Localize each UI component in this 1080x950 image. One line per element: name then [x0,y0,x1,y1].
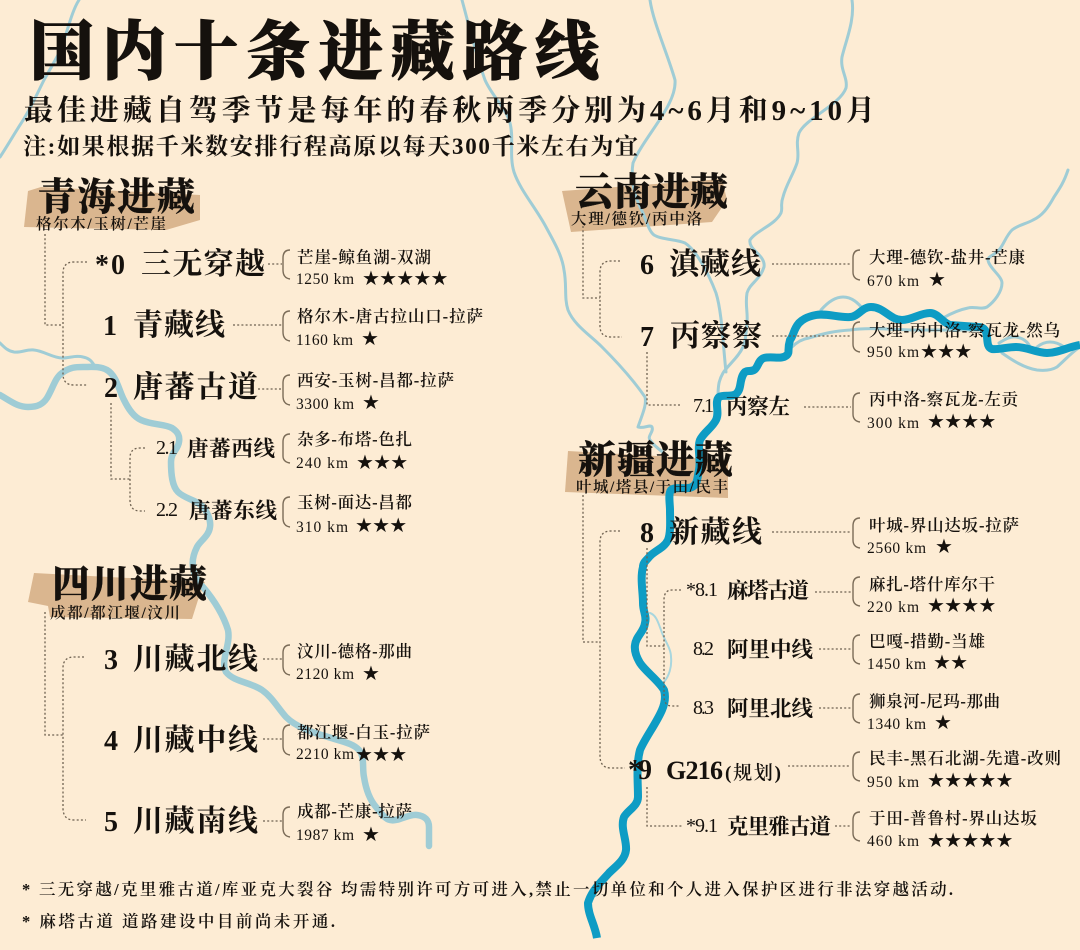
route 0: 1250 km [296,271,354,288]
route 9: *9 [628,755,652,786]
route 8.2 [693,632,986,674]
route 9.1: 克里雅古道 [727,815,831,839]
route 8.3: 1340 km [867,716,926,733]
route 2 [104,370,454,414]
route 4: 川藏中线 [133,724,258,757]
route 0 [95,248,448,290]
connectors [45,234,145,511]
route 2.1: ★★★ [356,450,407,474]
route 7.1: 7.1 [693,395,714,417]
route 2: ★ [362,390,379,414]
panel: Xinjiang [576,440,1061,852]
route 3: 3 [104,645,118,676]
route 7.1 [693,389,1020,433]
route 3: 汶川-德格-那曲 [297,641,412,661]
subheading: 叶城/塔县/于田/民丰 [576,477,728,496]
route 6: 6 [640,250,654,281]
route 0: 三无穿越 [141,248,265,281]
route 2: 3300 km [296,396,354,413]
route 2.2: 玉树-面达-昌都 [297,492,412,512]
route 7.1: 丙中洛-察瓦龙-左贡 [869,389,1020,409]
heading: 云南进藏 [575,172,728,214]
route 1 [103,306,483,350]
map: main blue river [588,307,1080,938]
subheading: 大理/德钦/丙中洛 [571,209,702,228]
route 2.2: 310 km [296,519,348,536]
route 9.1: *9.1 [686,815,718,837]
route 8.2: 阿里中线 [727,638,813,662]
route 8.1 [686,575,996,617]
route 7: ★★★ [920,339,971,363]
route 6: ★ [928,267,945,291]
connectors [45,612,86,820]
route 8.2: ★★ [933,650,967,674]
route 0: 芒崖-鲸鱼湖-双湖 [297,248,431,267]
route 9: 民丰-黑石北湖-先遣-改则 [869,748,1061,768]
route 2.1 [156,430,412,474]
route 6 [640,247,1026,291]
route 9.1 [686,809,1038,852]
route 3 [104,641,412,685]
route 7: 丙察察 [670,319,762,353]
route 7.1: ★★★★ [927,409,996,433]
route 6: 滇藏线 [669,248,761,281]
route 8.2: 巴嘎-措勤-当雄 [869,632,986,651]
subtitle: 最佳进藏自驾季节是每年的春秋两季分别为4~6月和9~10月 [24,93,875,127]
route 1: 格尔木-唐古拉山口-拉萨 [297,306,483,326]
route 2.2: ★★★ [355,513,406,537]
subheading: 格尔木/玉树/芒崖 [36,214,166,233]
route 5: 川藏南线 [133,805,258,838]
route 9: 950 km [867,774,919,791]
route 2.1: 唐蕃西线 [187,437,275,461]
route 7: 大理-丙中洛-察瓦龙-然乌 [869,320,1060,340]
route 9: ★★★★★ [927,768,1013,792]
route 7.1: 丙察左 [726,394,790,419]
route 4: 2210 km [296,746,354,763]
footnote 1: * 三无穿越/克里雅古道/库亚克大裂谷 均需特别许可方可进入,禁止一切单位和个人进入保护区进行非法穿越活动. [22,879,953,899]
route 7 [640,319,1060,363]
route 5: 1987 km [296,827,354,844]
route 2.2: 2.2 [156,499,178,521]
panel: Qinghai [36,177,483,537]
connectors [583,226,682,405]
route 8.1: 220 km [867,599,919,616]
route 8: ★ [935,534,952,558]
panel: Sichuan [45,564,430,846]
footnote 2: * 麻塔古道 道路建设中目前尚未开通. [22,911,335,931]
route 4: 4 [104,726,118,757]
route 8: 叶城-界山达坂-拉萨 [869,515,1019,535]
route 8.3: 8.3 [693,697,714,719]
route 2.2: 唐蕃东线 [189,499,277,523]
heading: 青海进藏 [38,177,195,219]
route 3: 2120 km [296,666,354,683]
route 2: 西安-玉树-昌都-拉萨 [297,370,454,390]
route 2: 2 [104,373,118,404]
route 9: (规划) [725,762,781,784]
route 5: 5 [104,807,118,838]
route 8.1: 麻塔古道 [727,579,809,603]
heading: 新疆进藏 [578,440,733,482]
route 4: 都江堰-白玉-拉萨 [297,722,430,742]
route 0: *0 [95,250,125,281]
route 8.2: 8.2 [693,638,714,660]
route 9 [628,748,1061,792]
route 1: 青藏线 [133,309,225,342]
route 2.1: 2.1 [156,437,178,459]
route 2.1: 杂多-布塔-色扎 [297,430,412,449]
route 1: 1160 km [296,332,353,349]
route 0: ★★★★★ [362,266,448,290]
route 8.3: 狮泉河-尼玛-那曲 [869,692,1000,711]
route 8: 新藏线 [669,516,762,549]
route 9.1: 460 km [867,833,919,850]
route 6: 670 km [867,273,919,290]
section patches [24,179,728,619]
route 8: 2560 km [867,540,926,557]
route 8.2: 1450 km [867,656,926,673]
route 7.1: 300 km [867,415,919,432]
connectors [583,495,682,826]
heading: 四川进藏 [52,564,207,606]
route 5 [104,801,412,846]
route 8.3: 阿里北线 [727,697,813,721]
route 7: 7 [640,322,654,353]
route 8.1: ★★★★ [927,593,996,617]
route 8.3: ★ [934,710,951,734]
route 8.1: *8.1 [686,579,718,601]
route 6: 大理-德钦-盐井-芒康 [869,247,1026,267]
route 9: G216 [666,756,723,785]
panel: Yunnan [571,172,1060,433]
route 2: 唐蕃古道 [133,370,258,404]
route 9.1: 于田-普鲁村-界山达坂 [869,809,1038,828]
route 8.3 [693,692,1000,734]
note: 注:如果根据千米数安排行程高原以每天300千米左右为宜 [23,134,638,159]
route 2.2 [156,492,412,537]
route 8.1: 麻扎-塔什库尔干 [869,575,995,594]
route 8: 8 [640,518,654,549]
route 3: 川藏北线 [133,643,258,676]
route 1: ★ [361,326,378,350]
subheading: 成都/都江堰/汶川 [50,604,180,622]
title: 国内十条进藏路线 [30,17,599,88]
route 1: 1 [103,311,117,342]
route 7: 950 km [867,344,919,361]
route 9.1: ★★★★★ [927,828,1013,852]
route 2.1: 240 km [296,455,348,472]
route 4 [104,722,430,766]
route 5: ★ [362,822,379,846]
route 3: ★ [362,661,379,685]
route 5: 成都-芒康-拉萨 [297,801,412,821]
route 8 [640,515,1019,558]
route 4: ★★★ [355,742,406,766]
